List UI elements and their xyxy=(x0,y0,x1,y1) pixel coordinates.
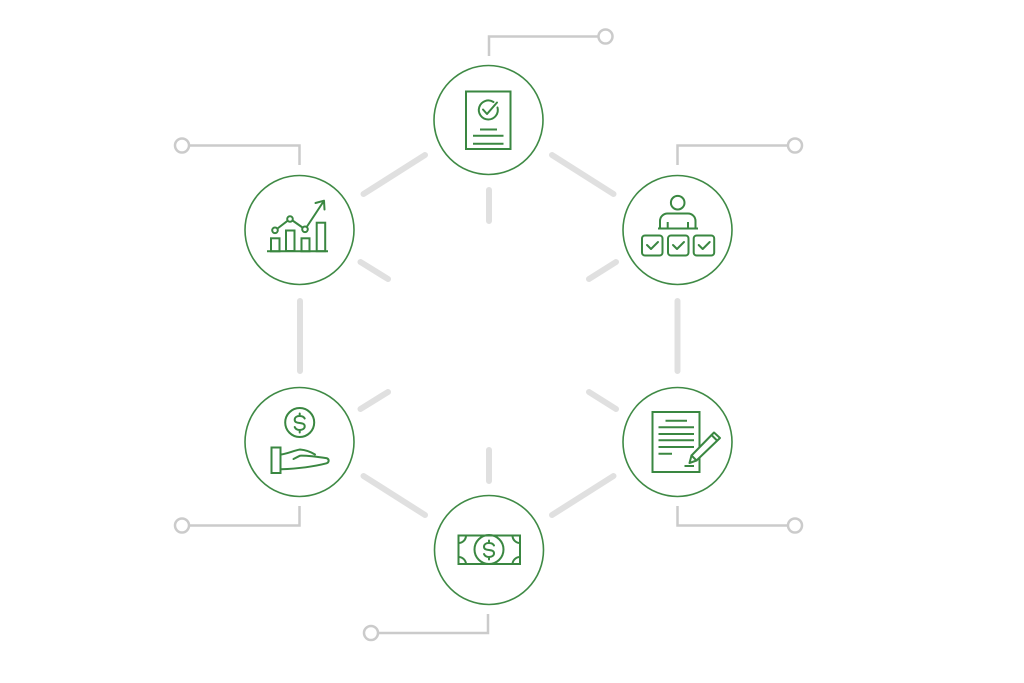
leader: lower right xyxy=(678,506,802,532)
icon: rising bar chart xyxy=(245,176,354,284)
leader: lower left xyxy=(175,506,300,532)
leader: upper left xyxy=(175,138,300,165)
icon: person with checkboxes xyxy=(623,176,732,284)
icon: approved document xyxy=(434,66,543,174)
icon: banknote xyxy=(434,496,544,604)
leader: bottom xyxy=(364,614,488,640)
icon: hand holding coin xyxy=(245,388,354,496)
icon: contract and pen xyxy=(623,388,732,496)
leader: upper right xyxy=(678,138,802,165)
leader: top xyxy=(489,30,612,56)
connecting spokes xyxy=(300,155,678,515)
